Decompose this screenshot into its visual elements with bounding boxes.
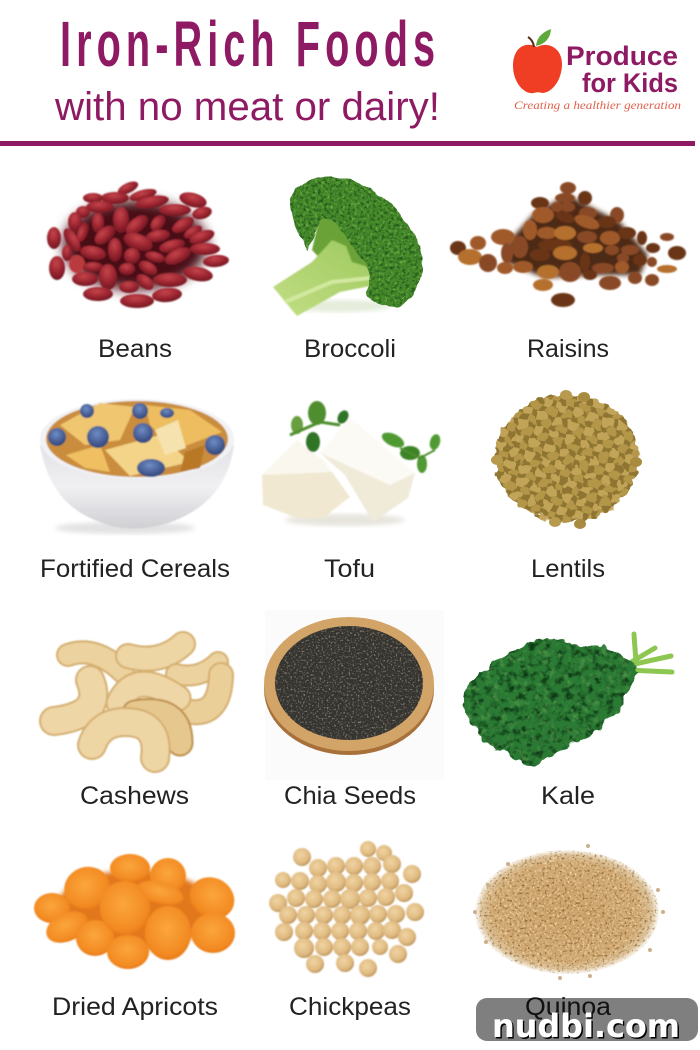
panel: kale	[463, 634, 672, 810]
label: Kale	[541, 782, 595, 810]
food image: cashews	[54, 644, 221, 758]
food image: quinoa	[473, 844, 665, 980]
panel: raisins	[450, 182, 686, 363]
label: Chickpeas	[289, 993, 411, 1021]
panel: broccoli	[273, 177, 422, 363]
food image: raisins	[450, 182, 686, 307]
label: Tofu	[324, 555, 375, 583]
panel: quinoa	[473, 844, 665, 1021]
logo: Produce for Kids: for Kids	[582, 68, 678, 98]
food image: lentils	[491, 390, 642, 529]
logo wordmark: Produce	[566, 41, 678, 71]
logo: Produce for Kids	[513, 29, 681, 112]
panel: chickpeas	[269, 841, 424, 1021]
panel: chia seeds	[264, 610, 444, 810]
panel: cashews	[54, 644, 221, 810]
panel: beans	[47, 179, 229, 363]
food image: dried apricots	[34, 854, 242, 969]
food image: bowl of chia seeds	[264, 610, 444, 780]
icon: apple	[513, 29, 562, 93]
subtitle: with no meat or dairy!	[54, 85, 440, 129]
food image: cereal bowl	[40, 399, 234, 534]
label: Fortified Cereals	[40, 555, 230, 583]
label: Broccoli	[304, 335, 396, 363]
panel: tofu	[262, 401, 442, 583]
watermark	[476, 998, 698, 1045]
logo tagline: Creating a healthier generation	[514, 98, 681, 112]
food image: kale	[463, 634, 672, 767]
panel: dried apricots	[34, 854, 242, 1021]
label: Cashews	[80, 782, 189, 810]
label: Quinoa	[525, 993, 611, 1021]
header divider	[0, 141, 695, 146]
label: Lentils	[531, 555, 605, 583]
food image: tofu with herbs	[262, 401, 442, 526]
food image: broccoli	[273, 177, 422, 316]
watermark: nudbi.com	[492, 1007, 680, 1045]
food image: chickpeas	[269, 841, 424, 977]
label: Beans	[98, 335, 172, 363]
label: Dried Apricots	[52, 993, 218, 1021]
label: Chia Seeds	[284, 782, 416, 810]
panel: fortified cereals	[40, 399, 234, 583]
label: Raisins	[527, 335, 609, 363]
panel: lentils	[491, 390, 642, 583]
food image: kidney beans	[47, 179, 229, 308]
title: Iron-Rich Foods	[60, 10, 435, 80]
